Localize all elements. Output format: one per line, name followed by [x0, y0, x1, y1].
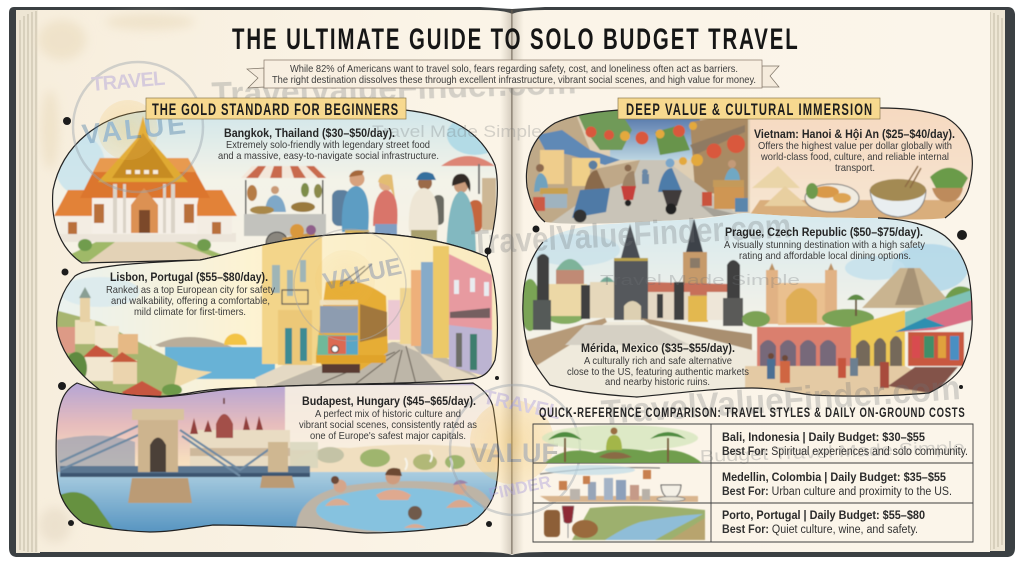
Lisbon outline: [57, 233, 497, 396]
icon: lantern street: [527, 108, 748, 225]
row: Porto: Best For: Quiet culture, wine, and safety.: [722, 524, 918, 536]
panel: Lisbon: [50, 230, 500, 400]
text: Bangkok: Bangkok, Thailand ($30–$50/day).: [224, 128, 395, 140]
text: Vietnam: Offers the highest value per dollar globally with: [758, 140, 952, 152]
icon: Charles Bridge: [520, 318, 760, 400]
icon: Vietnamese food: [745, 166, 975, 222]
title: THE ULTIMATE GUIDE TO SOLO BUDGET TRAVEL: [232, 23, 798, 56]
row: Porto: Porto, Portugal | Daily Budget: $55–$80: [722, 510, 925, 522]
icon: parliament: [190, 398, 318, 468]
text: Lisbon: mild climate for first-timers.: [134, 306, 246, 318]
text: Prague: Prague, Czech Republic ($50–$75/day).: [725, 227, 923, 239]
text: Lisbon: and walkability, offering a comfortable,: [111, 295, 270, 307]
row: Medellin: Best For: Urban culture and proximity to the US.: [722, 486, 952, 498]
Prague and Merida illustration: [523, 213, 972, 396]
logo: bottom centre: [450, 385, 580, 515]
watermark: site name: [211, 63, 965, 466]
icon: street food cart: [242, 165, 326, 244]
text: Prague: A visually stunning destination with a high safety: [724, 239, 926, 251]
icon: Medellin skyline and coffee: [540, 465, 698, 502]
Vietnam illustration: [527, 108, 972, 224]
intro ribbon: While 82% of Americans want to travel solo, fears regarding safety, cost, and loneliness often act as barriers.: [290, 63, 738, 75]
text: Budapest: [299, 396, 477, 442]
icon: backpackers group: [332, 156, 496, 262]
text: Lisbon: Ranked as a top European city for safety: [106, 284, 276, 296]
intro ribbon: The right destination dissolves these through excellent infrastructure, vibrant social scenes, and high value for money.: [272, 74, 756, 86]
text: Prague: rating and affordable local dining options.: [739, 250, 911, 262]
row: Bali: Best For: Spiritual experiences and solo community.: [722, 446, 968, 458]
text: Vietnam: Vietnam: Hanoi & Hội An ($25–$40/day).: [754, 129, 955, 141]
panel: Vietnam: [520, 105, 980, 230]
panel: Bangkok: [45, 105, 505, 270]
text: Budapest: Budapest, Hungary ($45–$65/day).: [302, 396, 476, 408]
Vietnam outline: [526, 108, 972, 222]
panel: Budapest: [50, 380, 500, 542]
icon: street buildings: [262, 236, 492, 378]
comparison table: [533, 424, 973, 542]
icon: hillside town: [50, 287, 182, 400]
watermark: logos: [73, 62, 580, 515]
Lisbon illustration: [50, 230, 500, 400]
page stains: [38, 14, 195, 543]
text: Bangkok: and a massive, easy-to-navigate social infrastructure.: [218, 150, 439, 162]
text: Merida: and nearby historic ruins.: [605, 376, 710, 388]
icon: thermal bath bathers: [296, 450, 496, 535]
icon: Prague castle and towers: [520, 218, 743, 331]
text: Vietnam: world-class food, culture, and reliable internal: [760, 151, 949, 163]
text: Prague: [724, 227, 926, 262]
Prague and Merida outline: [523, 218, 972, 397]
row: Bali: [722, 432, 968, 458]
logo: middle: [294, 229, 406, 341]
icon: chain bridge: [60, 409, 310, 503]
text: Lisbon: [106, 272, 276, 318]
logo: middle: VALUE: [321, 253, 404, 296]
text: Vietnam: transport.: [835, 162, 875, 174]
watermark: site name: TravelValueFinder.com: [600, 369, 962, 432]
watermark: site name: Travel Made Simple: [600, 272, 800, 289]
left page edges: [16, 10, 40, 553]
right page edges: [985, 10, 1005, 551]
icon: Merida cathedral and pyramid: [742, 263, 972, 327]
logo: top left: TRAVEL: [91, 68, 166, 96]
ink splatter dots: [58, 117, 967, 527]
icon: scooter riders: [533, 158, 748, 222]
text: Merida: A culturally rich and safe alternative: [584, 355, 732, 367]
text: Merida: [567, 343, 749, 388]
row: Medellin: Medellin, Colombia | Daily Budget: $35–$55: [722, 472, 947, 484]
icon: Porto wine and river: [544, 506, 705, 540]
icon: Bali yoga and palms: [542, 425, 702, 463]
text: Lisbon: Lisbon, Portugal ($55–$80/day).: [110, 272, 268, 284]
Budapest illustration: [50, 380, 500, 542]
row: Medellin: [722, 472, 952, 498]
text: Merida: close to the US, featuring authentic markets: [567, 366, 749, 378]
icon: Thai temple: [54, 116, 237, 264]
Bangkok outline: [53, 110, 497, 263]
icon: cobbled street and rails: [254, 342, 478, 386]
text: Bangkok: Extremely solo-friendly with legendary street food: [226, 139, 430, 151]
logo: bottom centre: TRAVEL: [481, 386, 562, 424]
heading: quick reference: QUICK-REFERENCE COMPARISON: TRAVEL STYLES & DAILY ON-GROUND COSTS: [539, 404, 965, 421]
text: Bangkok: [218, 128, 439, 162]
row: Porto: [722, 510, 925, 536]
logo: bottom centre: FINDER: [487, 472, 553, 504]
row: Bali: Bali, Indonesia | Daily Budget: $30–$55: [722, 432, 926, 444]
text: Budapest: vibrant social scenes, consistently rated as: [299, 419, 477, 431]
watermark: site name: TravelValueFinder.com: [211, 63, 577, 114]
Budapest outline: [56, 383, 498, 533]
watermark: site name: TravelValueFinder.com: [470, 207, 792, 262]
text: Budapest: one of Europe's safest major capitals.: [310, 430, 466, 442]
watermark: site name: Budget Travel Made Simple: [699, 438, 965, 466]
Bangkok illustration: [54, 110, 496, 262]
watermark: site name: Travel Made Simple: [372, 122, 542, 141]
icon: Merida market: [745, 290, 972, 400]
logo: bottom centre: VALUE: [470, 438, 560, 468]
icon: sea and sun: [149, 333, 276, 386]
logo: top left: [73, 62, 203, 192]
text: Vietnam: [754, 129, 955, 174]
text: Budapest: A perfect mix of historic culture and: [315, 408, 461, 420]
heading: gold standard: THE GOLD STANDARD FOR BEGINNERS: [152, 100, 398, 119]
book gutter: [500, 9, 524, 554]
panel: Prague and Merida: [522, 213, 973, 398]
logo: top left: VALUE: [80, 108, 187, 150]
intro ribbon: [247, 60, 779, 88]
heading: deep value: DEEP VALUE & CULTURAL IMMERSION: [626, 100, 872, 119]
text: Merida: Mérida, Mexico ($35–$55/day).: [581, 343, 735, 355]
icon: yellow tram: [316, 264, 388, 373]
